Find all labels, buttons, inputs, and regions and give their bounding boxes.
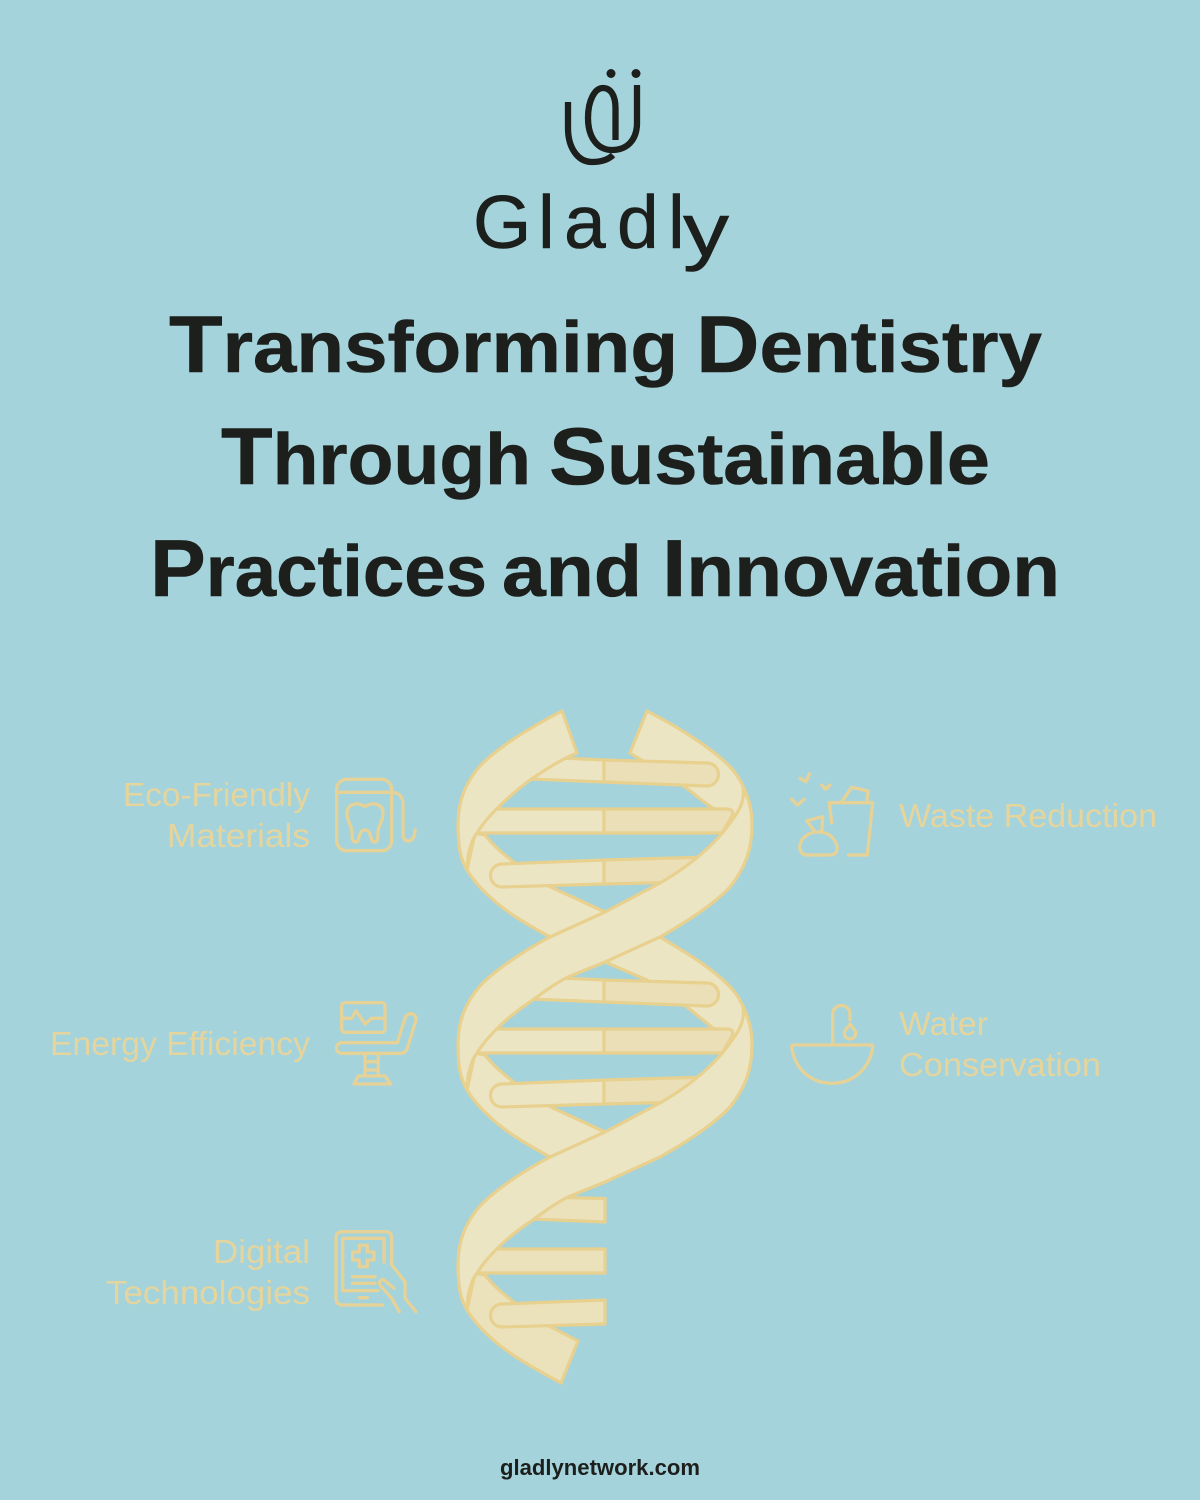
rungs: top set	[470, 757, 733, 887]
label: Conservation	[899, 1046, 1101, 1083]
icon: dental chair and monitor	[336, 1003, 416, 1084]
front ribbon: lower crossing	[458, 1008, 752, 1310]
label	[106, 1233, 310, 1311]
label	[123, 776, 310, 854]
label: Waste Reduction	[899, 797, 1157, 834]
back ribbon: bottom end	[467, 1273, 578, 1383]
rungs: bottom half set	[470, 1197, 605, 1327]
title line 3: and	[502, 532, 642, 612]
item: water conservation	[792, 1005, 1101, 1083]
dna helix	[458, 711, 752, 1383]
item: energy efficiency	[50, 1003, 416, 1084]
back ribbon: top right	[630, 711, 752, 825]
label	[899, 1005, 1101, 1083]
icon: tablet in hand	[336, 1232, 416, 1312]
logo icon	[568, 69, 640, 162]
title line 3: Practices	[150, 524, 487, 614]
title line 1	[169, 300, 1042, 390]
title line 3	[150, 524, 1060, 614]
label: Energy Efficiency	[50, 1025, 310, 1062]
rungs: middle set	[470, 977, 733, 1107]
title line 2: Through	[221, 412, 531, 502]
footer url: gladlynetwork.com	[500, 1455, 700, 1480]
label: Materials	[167, 817, 310, 854]
item: eco-friendly materials	[123, 776, 415, 854]
title line 2	[221, 412, 990, 502]
back ribbon: lower	[467, 1053, 610, 1165]
label: Technologies	[106, 1274, 310, 1311]
title line 1: Transforming	[169, 300, 678, 390]
item: waste reduction	[792, 774, 1157, 855]
label: Eco-Friendly	[123, 776, 310, 813]
icon: tooth floss box	[337, 779, 415, 851]
title	[150, 300, 1060, 614]
front ribbon: top left	[458, 711, 577, 870]
icon: sink with faucet	[792, 1006, 873, 1083]
logo wordmark: Gladl	[473, 180, 685, 264]
item: digital technologies	[106, 1232, 416, 1312]
title line 3: Innovation	[662, 524, 1060, 614]
label: Digital	[213, 1233, 310, 1270]
icon: waste bin and bag	[792, 774, 873, 855]
logo wordmark: y	[683, 188, 730, 272]
front ribbon: upper crossing	[458, 788, 752, 1090]
label: Water	[899, 1005, 988, 1042]
back ribbon: middle	[467, 833, 752, 1045]
title line 2: Sustainable	[549, 412, 990, 502]
title line 1: Dentistry	[696, 300, 1042, 390]
